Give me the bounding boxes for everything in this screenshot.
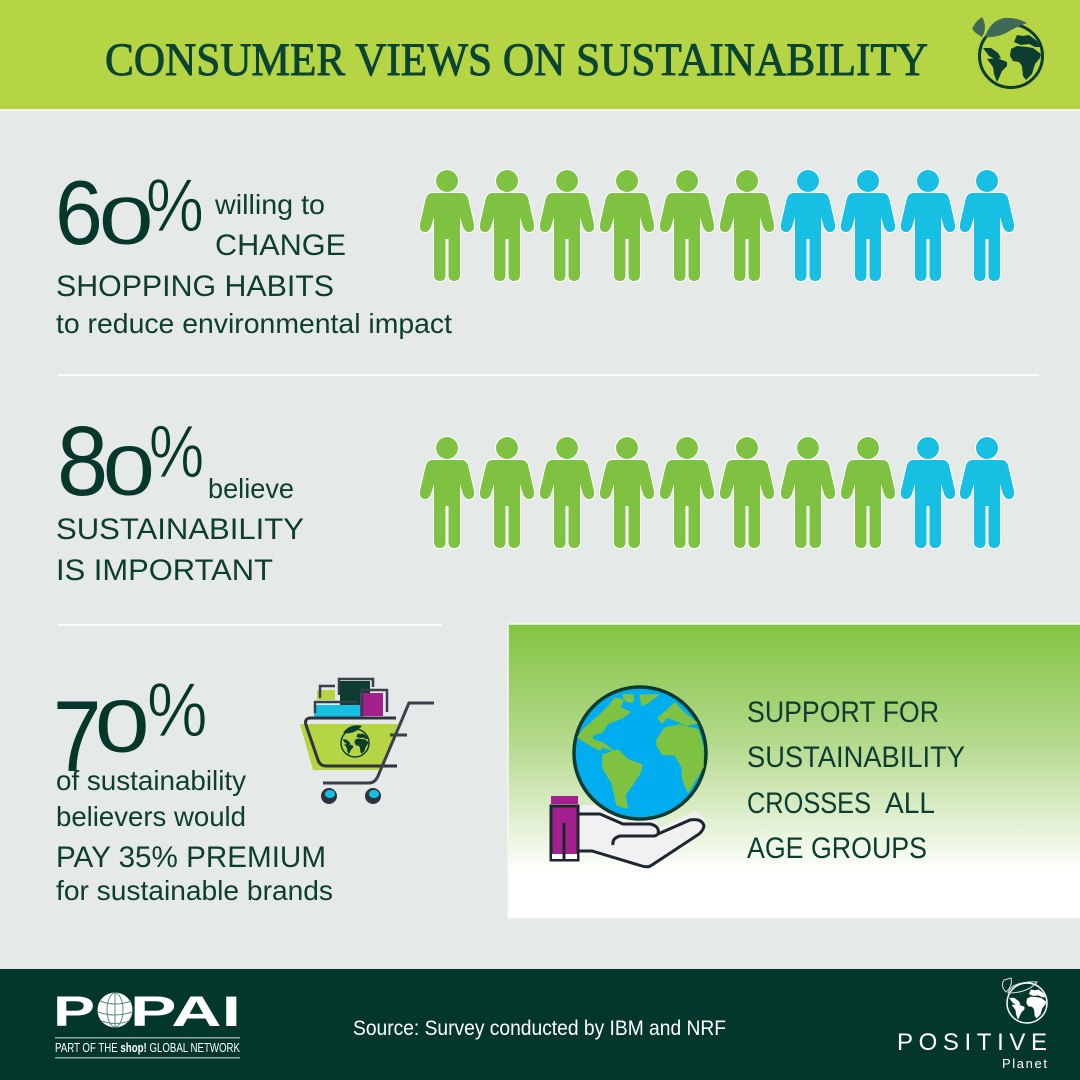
footer band	[0, 969, 1080, 1080]
text block: 80% stat: IS IMPORTANT	[56, 554, 273, 587]
text block: 60% stat: willing to	[214, 189, 325, 220]
text block: 70% stat: of sustainability	[56, 765, 246, 796]
text block: 80% stat: 0	[103, 432, 155, 510]
text block: 60% stat: 0	[99, 183, 154, 258]
logo: POPAI: PART OF THE shop! GLOBAL NETWORK	[55, 1040, 240, 1055]
panel text: SUSTAINABILITY	[747, 741, 965, 774]
text block: 70% stat: for sustainable brands	[56, 875, 333, 906]
logo: POPAI: PAI	[130, 988, 241, 1036]
icon: globe with leaves in header	[972, 17, 1042, 88]
panel text: SUPPORT FOR	[747, 696, 939, 729]
text block: 80% stat: believe	[208, 473, 294, 504]
text block: 80% stat	[56, 407, 304, 587]
text block: 80% stat: 8	[57, 407, 108, 517]
logo: Positive Planet: POSITIVE	[897, 1029, 1047, 1056]
panel: support for sustainability	[508, 624, 1080, 918]
logo: Positive Planet	[897, 978, 1047, 1071]
pictogram: 6 of 10 people green	[420, 170, 1014, 281]
logo: Positive Planet: Planet	[1002, 1056, 1047, 1071]
text block: 60% stat: %	[146, 163, 204, 247]
source note: Source: Survey conducted by IBM and NRF	[353, 1017, 726, 1040]
panel text: AGE GROUPS	[747, 832, 927, 865]
panel text: CROSSES	[747, 787, 871, 820]
text block: 60% stat: SHOPPING HABITS	[56, 270, 334, 303]
icon: shopping cart	[300, 679, 434, 804]
panel text: ALL	[885, 787, 935, 820]
header banner	[0, 0, 1080, 111]
text block: 60% stat: 6	[55, 162, 103, 264]
text block: 60% stat: to reduce environmental impact	[56, 308, 452, 339]
logo: POPAI	[53, 988, 241, 1058]
text block: 60% stat	[55, 162, 452, 339]
text block: 70% stat: believers would	[56, 801, 246, 832]
logo: POPAI: P	[53, 988, 95, 1036]
text block: 80% stat: SUSTAINABILITY	[56, 513, 304, 546]
title: CONSUMER VIEWS ON SUSTAINABILITY	[105, 34, 928, 86]
text block: 80% stat: %	[149, 411, 204, 493]
text block: 60% stat: CHANGE	[215, 229, 346, 262]
text block: 70% stat	[53, 669, 333, 906]
panel text	[747, 696, 965, 865]
pictogram: 8 of 10 people green	[420, 437, 1014, 548]
text block: 70% stat: %	[147, 669, 207, 753]
text block: 70% stat: 7	[53, 680, 101, 792]
text block: 70% stat: PAY 35% PREMIUM	[56, 841, 326, 874]
icon: hand holding globe	[551, 687, 706, 867]
text block: 70% stat: 0	[95, 685, 150, 768]
